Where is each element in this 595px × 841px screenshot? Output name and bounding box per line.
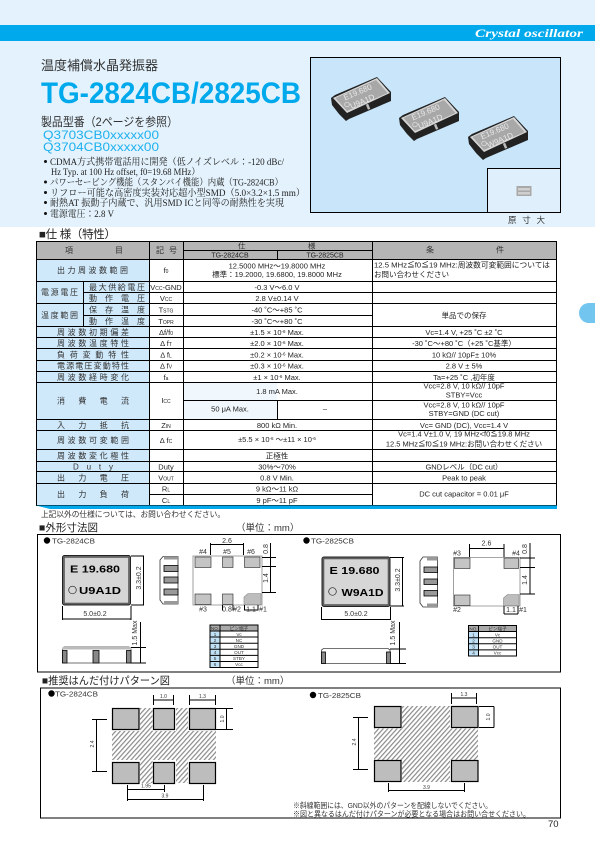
pin table: 3	[214, 644, 217, 649]
header background	[0, 0, 595, 227]
value column: Max.	[286, 350, 304, 360]
value column: -0.3 V〜6.0 V	[254, 283, 300, 292]
value column: 9 pF〜11 pF	[256, 496, 298, 505]
drawing: TG-2825CB: 3.3±0.2	[395, 568, 402, 592]
symbol column: RL	[162, 484, 170, 494]
drawing: TG-2825CB: TG-2825CB	[311, 536, 354, 546]
pattern: TG-2825CB: 1.0	[486, 713, 492, 720]
table fills	[36, 241, 557, 505]
value column: Max.	[286, 328, 304, 337]
symbol column: f0	[164, 266, 169, 275]
value column: –	[323, 404, 328, 414]
pin table: Vc	[495, 632, 501, 638]
part number block: 製品型番（2ページを参照）	[41, 115, 178, 129]
panel: solder patterns	[40, 688, 560, 818]
table grid	[36, 242, 556, 506]
row labels: 動作電圧	[89, 293, 145, 303]
heading: outline dimensions: ■外形寸法図	[39, 521, 98, 534]
conditions column: Peak to peak	[442, 474, 486, 482]
top view: U9A1D	[79, 585, 121, 597]
icon: crystal chip 2	[399, 97, 459, 141]
conditions column: Ta=+25 ˚C ,初年度	[433, 372, 495, 382]
pin table: GND	[234, 644, 245, 649]
pin table: ピン端子	[230, 625, 249, 632]
drawing: TG-2825CB: 0.8	[522, 544, 529, 554]
value column: 30%〜70%	[258, 462, 296, 472]
conditions column: 12.5 MHz≦f0≦19 MHz:お問い合わせください	[386, 438, 542, 448]
row labels: 保存温度	[89, 304, 145, 314]
top category bar	[0, 25, 595, 41]
pin table: NO.	[211, 626, 219, 631]
value column: -30 ˚C〜+80 ˚C	[251, 317, 303, 326]
bottom view	[454, 558, 520, 606]
symbol column: Δ fL	[160, 350, 172, 360]
icon: crystal chip 1: U9A1D	[349, 92, 376, 111]
part number block: Q3703CB0xxxxx00	[43, 130, 159, 142]
drawing: TG-2825CB: #1	[519, 607, 527, 614]
pattern: TG-2825CB: 2.4	[352, 738, 358, 745]
feature list	[44, 156, 305, 220]
bottom view	[193, 556, 262, 605]
drawing: TG-2824CB: #2	[233, 606, 241, 614]
pattern: TG-2825CB	[310, 691, 494, 792]
symbol column: ICC	[161, 396, 171, 405]
heading: solder pattern: ■推奨はんだ付けパターン図	[42, 674, 170, 687]
drawing: TG-2825CB: #2	[453, 607, 461, 614]
symbol column: Δ fV	[160, 362, 173, 370]
drawing: TG-2824CB: 1.1	[246, 606, 256, 614]
actual size inset	[488, 168, 560, 212]
value column: -6	[270, 436, 274, 441]
row labels: 周波数変化極性	[57, 450, 129, 460]
dimensions	[92, 695, 233, 801]
table header: 様	[308, 240, 316, 250]
drawing: TG-2825CB	[303, 536, 535, 664]
pin table: ピン端子	[488, 626, 507, 632]
drawing: TG-2824CB: #1	[259, 606, 267, 614]
table header: 項目	[65, 246, 123, 255]
pattern: TG-2824CB: 1.3	[199, 694, 206, 700]
pin table: 1	[214, 632, 217, 637]
actual size caption: 原寸大	[508, 215, 545, 225]
symbol column	[150, 266, 182, 505]
value column: 正極性	[266, 450, 289, 460]
drawing: TG-2825CB: 5.0±0.2	[344, 611, 368, 618]
page number: 70	[548, 819, 559, 830]
row labels	[41, 265, 145, 499]
icon: crystal chip 1: E19.680	[342, 82, 374, 102]
conditions column: お問い合わせください	[374, 269, 449, 279]
row labels: 出力電圧	[57, 472, 129, 482]
row labels: 周波数温度特性	[57, 338, 129, 348]
symbol column: VCC	[160, 294, 173, 303]
value column: 2.8 V±0.14 V	[255, 294, 299, 303]
value column: 12.5000 MHz〜19.8000 MHz	[229, 262, 326, 270]
front view	[322, 648, 390, 664]
value column: 50 μA Max.	[211, 404, 249, 414]
value column: ±0.3 × 10	[250, 362, 282, 370]
conditions column: 単品での保存	[442, 310, 487, 320]
unit label: （単位：mm）	[236, 522, 299, 534]
drawing: TG-2824CB: 0.8	[263, 544, 270, 554]
pin table: 3	[472, 644, 475, 650]
panel: outline drawings	[38, 534, 560, 672]
row labels: 出力負荷	[57, 489, 129, 499]
conditions column: GNDレベル（DC cut）	[425, 462, 503, 472]
row labels: 動作温度	[89, 316, 145, 326]
feature list: 電源電圧：2.8 V	[50, 209, 114, 220]
notes	[293, 800, 530, 818]
value column: 標準：19.2000, 19.6800, 19.8000 MHz	[212, 269, 342, 279]
drawing: TG-2824CB	[44, 536, 276, 668]
icon: crystal chip 3: E19.680	[479, 121, 511, 141]
feature list: CDMA方式携帯電話用に開発（低ノイズレベル：-120 dBc/	[50, 156, 284, 168]
value column: -6	[282, 352, 286, 356]
page tab	[579, 303, 595, 323]
drawing: TG-2825CB: #4	[512, 550, 520, 558]
table header: TG-2825CB	[306, 252, 344, 260]
side view	[420, 557, 438, 607]
front view	[62, 647, 131, 663]
conditions column: STBY=GND (DC cut)	[429, 409, 500, 418]
conditions column: STBY=Vcc	[446, 390, 482, 400]
symbol column: TOPR	[158, 317, 174, 326]
icon: crystal chip 1	[331, 77, 391, 121]
pattern: TG-2824CB: 2.4	[90, 740, 96, 747]
drawing: TG-2824CB: #4	[199, 549, 207, 556]
conditions column: -30 ˚C〜+80 ˚C（+25 ˚C基準）	[412, 338, 516, 348]
value column: 800 kΩ Min.	[257, 421, 297, 430]
pattern: TG-2824CB: 1.0	[160, 694, 167, 700]
symbol column: Δ fT	[160, 339, 172, 348]
value column: -6	[282, 340, 286, 345]
unit label: （単位：mm）	[226, 675, 289, 687]
symbol column: ZIN	[161, 421, 171, 430]
feature list: パワーセービング機能（スタンバイ機能）内蔵（TG-2824CB）	[50, 176, 283, 188]
value column: 9 kΩ〜11 kΩ	[256, 484, 299, 494]
value column: -6	[278, 374, 283, 379]
value column: Max.	[286, 339, 304, 348]
row labels: 入力抵抗	[57, 420, 129, 430]
drawing: TG-2824CB: #6	[247, 549, 255, 556]
value column: 1.8 mA Max.	[256, 387, 298, 396]
value column: ±5.5 × 10	[238, 435, 270, 444]
row labels: 温度範囲	[41, 310, 78, 320]
top view	[322, 557, 390, 606]
table header: 記号	[156, 246, 177, 255]
pattern: TG-2824CB: 1.0	[220, 715, 226, 722]
value column: Max.	[282, 373, 301, 382]
value column: ±2.0 × 10	[250, 339, 282, 348]
symbol column: CL	[162, 496, 170, 505]
pin table: 5	[214, 656, 217, 661]
pattern: TG-2824CB: 3.9	[162, 794, 169, 800]
icon: crystal chip 2: U9A1D	[417, 112, 444, 131]
pin table: 6	[214, 662, 217, 667]
pin table: GND	[492, 638, 503, 644]
pin table	[468, 626, 516, 656]
row labels: 電源電圧	[41, 288, 78, 297]
symbol column: Δ fC	[160, 436, 173, 445]
conditions column: Vc= GND (DC), Vcc=1.4 V	[420, 421, 508, 430]
feature list: 耐熱AT 振動子内蔵で、汎用SMD ICと同等の耐熱性を実現	[50, 197, 284, 209]
part number block	[41, 115, 178, 154]
pattern: TG-2824CB: 1.95	[141, 784, 151, 790]
icon: crystal chip 3: W9A1D	[486, 131, 515, 150]
row labels: 出力周波数範囲	[57, 265, 128, 275]
pin table: OUT	[493, 644, 503, 650]
top view: W9A1D	[342, 587, 384, 599]
drawing: TG-2825CB: 2.6	[482, 540, 491, 548]
value column: -6	[312, 436, 316, 441]
icon: crystal chip 3	[468, 116, 528, 160]
icon: crystal chip 2: E19.680	[410, 102, 442, 122]
pin table: 2	[472, 638, 475, 644]
row labels: 周波数可変範囲	[57, 435, 129, 445]
notes: ※斜線範囲には、GND以外のパターンを配線しないでください。	[293, 800, 492, 810]
feature list: リフロー可能な高密度実装対応超小型SMD（5.0×3.2×1.5 mm）	[50, 187, 305, 199]
drawing: TG-2824CB: TG-2824CB	[52, 536, 95, 546]
value column: 0.8 V Min.	[260, 474, 294, 482]
row labels: 電源電圧変動特性	[57, 360, 129, 370]
pin table: Vc	[236, 632, 242, 637]
row labels: 周波数初期偏差	[57, 327, 129, 337]
value column: -6	[282, 329, 286, 334]
spec table	[36, 240, 557, 509]
pin table	[210, 625, 258, 668]
row labels: 消費電流	[57, 396, 129, 406]
pattern: TG-2825CB: TG-2825CB	[318, 691, 361, 700]
pin table: 4	[472, 650, 475, 656]
drawing: TG-2825CB: 1.1	[506, 607, 516, 614]
pin table: 1	[472, 632, 475, 638]
conditions column: 12.5 MHz≦f0≦19 MHz:周波数可変範囲については	[374, 260, 551, 270]
pin table: 4	[214, 650, 217, 655]
drawing: TG-2824CB: 2.6	[222, 538, 232, 545]
pin table: Vcc	[494, 650, 502, 656]
symbol column: VCC-GND	[150, 283, 182, 292]
drawing: TG-2825CB: 1.5 Max	[390, 620, 397, 645]
symbol column: VOUT	[158, 474, 174, 482]
conditions column: 2.8 V ± 5%	[446, 362, 483, 370]
value column: 〜±11 × 10	[274, 435, 312, 444]
feature list: Hz Typ. at 100 Hz offset, f0=19.68 MHz）	[51, 167, 200, 178]
drawing: TG-2824CB: 1.5 Max	[132, 620, 139, 645]
pattern: TG-2824CB	[48, 690, 233, 801]
conditions column: Vcc=2.8 V, 10 kΩ// 10pF	[423, 400, 505, 410]
pattern: TG-2825CB: 3.9	[423, 785, 430, 791]
pin table: 2	[214, 638, 217, 643]
table footnote: 上記以外の仕様については、お問い合わせください。	[41, 509, 225, 519]
conditions column	[374, 260, 551, 498]
drawing: TG-2824CB: #5	[223, 549, 231, 556]
drawing: TG-2824CB: 0.8	[222, 606, 232, 614]
drawing: TG-2824CB: 3.3±0.2	[136, 566, 143, 590]
subtitle: 温度補償水晶発振器	[41, 58, 158, 73]
pin table: STBY	[233, 656, 245, 661]
pattern: TG-2824CB: TG-2824CB	[55, 690, 98, 698]
value column: -40 ˚C〜+85 ˚C	[251, 306, 303, 314]
top view: E 19.680	[330, 565, 380, 577]
drawing: TG-2824CB: 5.0±0.2	[83, 611, 107, 618]
value column: Max.	[286, 362, 304, 370]
row labels: Duty	[73, 462, 113, 472]
part number block: Q3704CB0xxxxx00	[43, 142, 159, 154]
heading: specifications: ■仕 様（特性）	[39, 227, 116, 241]
panel: product photo	[310, 58, 560, 212]
top view: E 19.680	[70, 564, 120, 576]
drawing: TG-2825CB: 1.4	[522, 575, 529, 585]
pin table: OUT	[234, 650, 244, 655]
symbol column: fa	[164, 373, 169, 382]
table header: TG-2824CB	[211, 252, 249, 260]
notes: ※図と異なるはんだ付けパターンが必要となる場合はお問い合せください。	[293, 808, 530, 818]
table bottom blue band	[36, 506, 557, 509]
value column: ±0.2 × 10	[250, 350, 282, 360]
symbol column: Duty	[158, 462, 174, 472]
value column: -6	[282, 362, 286, 368]
table header: 条件	[426, 244, 504, 254]
side view	[160, 556, 178, 604]
row labels: 周波数経時変化	[57, 372, 129, 382]
pattern: TG-2825CB: 1.3	[461, 692, 468, 698]
value column: ±1.5 × 10	[250, 328, 282, 337]
conditions column: Vc=1.4 V±1.0 V, 19 MHz<f0≦19.8 MHz	[398, 428, 530, 438]
conditions column: Vcc=2.8 V, 10 kΩ// 10pF	[423, 382, 505, 390]
row labels: 負荷変動特性	[57, 350, 129, 360]
title: TG-2824CB/2825CB	[41, 77, 301, 110]
dimensions	[62, 556, 144, 620]
table header: 仕	[238, 240, 246, 250]
pin table: NO.	[469, 626, 478, 632]
pin table: NC	[236, 638, 243, 643]
table header	[65, 240, 504, 260]
value column	[211, 262, 342, 505]
value column: ±1 × 10	[253, 373, 278, 382]
symbol column: Δf/f0	[159, 328, 173, 337]
top view	[62, 556, 130, 605]
drawing: TG-2825CB: #3	[453, 550, 461, 558]
conditions column: Vc=1.4 V, +25 ˚C ±2 ˚C	[425, 328, 503, 337]
conditions column: DC cut capacitor = 0.01 μF	[419, 490, 509, 498]
symbol column: TSTG	[159, 306, 174, 314]
drawing: TG-2824CB: 1.4	[263, 573, 270, 583]
top category bar: Crystal oscillator	[475, 28, 584, 40]
row labels: 最大供給電圧	[89, 282, 145, 292]
drawing: TG-2824CB: #3	[199, 606, 207, 614]
pin table: Vcc	[235, 662, 244, 667]
conditions column: 10 kΩ// 10pF± 10%	[432, 350, 496, 360]
